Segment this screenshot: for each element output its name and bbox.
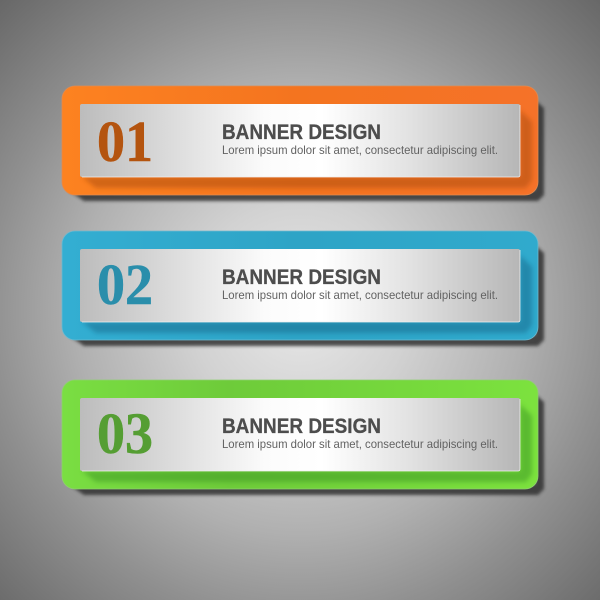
plate 03 bbox=[80, 398, 520, 471]
panel: banner 03 bbox=[62, 380, 544, 495]
number 03: 03 bbox=[97, 401, 153, 466]
number 01: 01 bbox=[97, 109, 153, 174]
text 02: Lorem ipsum dolor sit amet, consectetur adipiscing elit. bbox=[222, 288, 498, 302]
heading 02: BANNER DESIGN bbox=[222, 266, 381, 289]
outer shadow 02 bbox=[68, 245, 544, 346]
plate shadow 03 bbox=[82, 404, 532, 482]
text 03: Lorem ipsum dolor sit amet, consectetur adipiscing elit. bbox=[222, 437, 498, 451]
plate edge 02 bbox=[82, 250, 520, 322]
panel: banner 01 bbox=[62, 86, 544, 201]
blue frame bbox=[62, 231, 538, 340]
orange frame bbox=[62, 86, 538, 195]
heading 01: BANNER DESIGN bbox=[222, 121, 381, 144]
number 02: 02 bbox=[97, 252, 153, 317]
plate shadow 01 bbox=[82, 110, 532, 188]
plate 02 bbox=[80, 249, 520, 322]
heading 03: BANNER DESIGN bbox=[222, 415, 381, 438]
outer shadow 03 bbox=[68, 394, 544, 495]
text 01: Lorem ipsum dolor sit amet, consectetur adipiscing elit. bbox=[222, 143, 498, 157]
green frame bbox=[62, 380, 538, 489]
outer shadow 01 bbox=[68, 100, 544, 201]
plate edge 01 bbox=[82, 105, 520, 177]
panel: banner 02 bbox=[62, 231, 544, 346]
plate shadow 02 bbox=[82, 255, 532, 333]
plate edge 03 bbox=[82, 399, 520, 471]
plate 01 bbox=[80, 104, 520, 177]
